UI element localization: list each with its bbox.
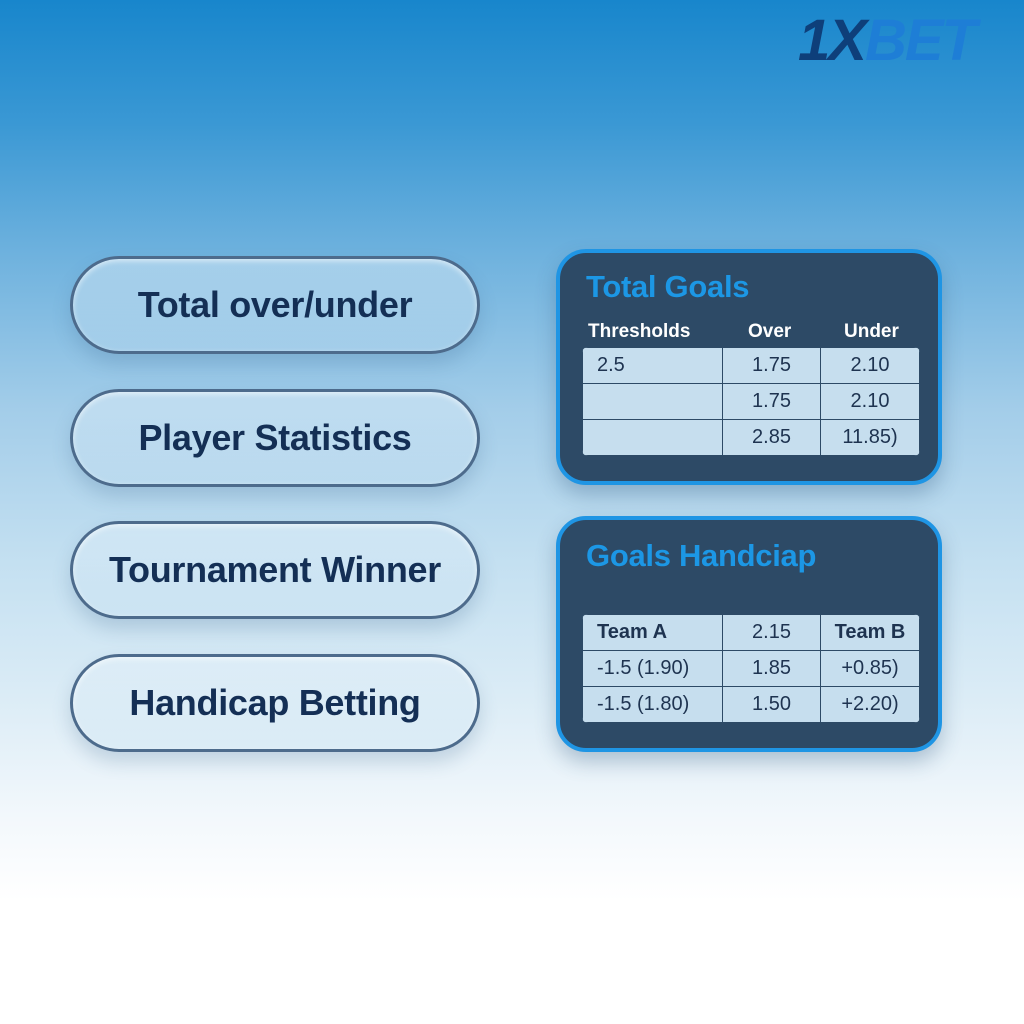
column headers [588,321,899,342]
logo: 1XBET: 1XBET [798,8,975,73]
odds table [582,347,920,456]
odds table: 2.10 [851,354,889,376]
pill: Handicap Betting: Handicap Betting [129,682,421,723]
odds table: 1.75 [752,390,791,412]
handicap table: Team A [597,621,667,643]
pill: Total over/under: Total over/under [138,284,412,325]
handicap table: 1.50 [752,693,791,715]
panel title: Total Goals [586,269,749,304]
odds table: 11.85) [842,426,898,448]
panel: Total Goals [556,249,942,485]
odds table: 2.10 [851,390,889,412]
handicap table: +2.20) [841,693,899,715]
handicap table: 2.15 [752,621,791,643]
pill: Handicap Betting [70,654,480,752]
column headers: Under [844,321,899,342]
panel: Goals Handicap [556,516,942,752]
odds table: 2.5 [597,354,625,376]
odds table: 1.75 [752,354,791,376]
panel title: Goals Handciap [586,538,816,573]
handicap table: 1.85 [752,657,791,679]
pill: Tournament Winner [70,521,480,619]
pill: Total over/under [70,256,480,354]
pill: Tournament Winner: Tournament Winner [109,549,441,590]
column headers: Thresholds [588,321,690,342]
column headers: Over [748,321,791,342]
pill: Player Statistics [70,389,480,487]
odds table: 2.85 [752,426,791,448]
handicap table: +0.85) [841,657,899,679]
handicap table: Team B [835,621,905,643]
handicap table: -1.5 (1.80) [597,693,689,715]
pill: Player Statistics: Player Statistics [138,417,412,458]
handicap table: -1.5 (1.90) [597,657,689,679]
handicap table [582,614,920,723]
